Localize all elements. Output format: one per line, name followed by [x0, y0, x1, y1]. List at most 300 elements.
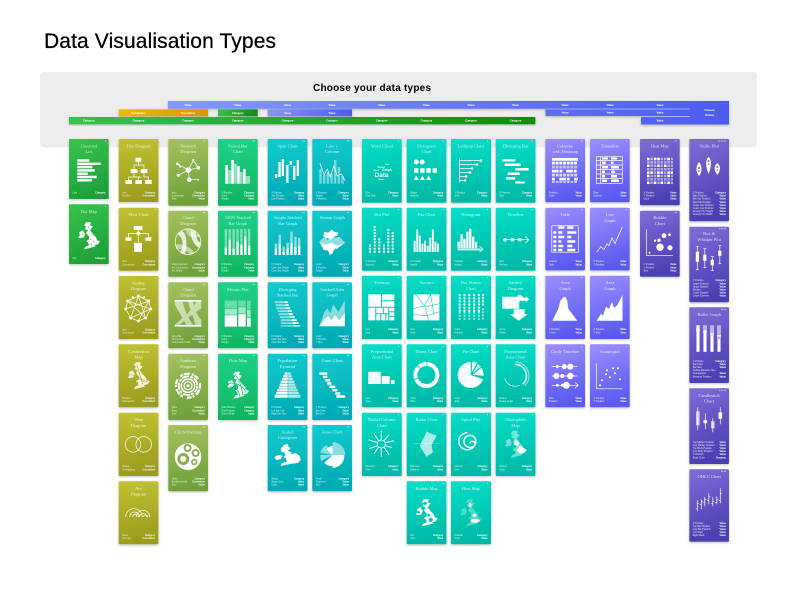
footer: Category [477, 534, 488, 537]
footer: X Position [693, 522, 704, 525]
footer: Bar End [316, 412, 325, 415]
footer: Shape [122, 465, 130, 468]
footer: Value [620, 263, 627, 266]
footer: Value [670, 263, 677, 266]
footer: Value [720, 534, 726, 537]
footer: Category [145, 192, 156, 194]
icon: word cloud [373, 163, 392, 181]
footer: Y Position [594, 400, 605, 403]
footer [549, 397, 582, 403]
footer [316, 406, 349, 415]
footer: Category [433, 397, 444, 400]
title: Stacked Area Graph: Graph [327, 292, 339, 297]
icon: OHLC ticks [696, 488, 722, 511]
icon: radial columns [368, 431, 394, 457]
footer [122, 397, 156, 403]
footer: Value [576, 195, 582, 198]
footer: Category [244, 335, 255, 338]
footer: Value [526, 468, 533, 471]
footer: Correlation [192, 409, 205, 412]
footer: Max Position [693, 195, 707, 198]
icon: candlesticks [696, 407, 722, 432]
title: Box & Whisker Plot: Whisker Plot [697, 237, 722, 242]
icon: timetable [596, 157, 622, 183]
card: Circle Packing [168, 425, 208, 491]
footer [222, 263, 255, 272]
card: Radial Column Chart [362, 413, 402, 476]
icon: lollipops [460, 158, 482, 182]
footer: Category [522, 260, 533, 263]
title: Line + Column: Line + [326, 144, 338, 148]
footer: Size [410, 537, 416, 540]
footer: Color [222, 338, 227, 341]
footer: Category [244, 409, 255, 412]
icon: 100% stacked bars [225, 229, 250, 255]
bar: value row 1 [168, 101, 729, 124]
title: Circle Packing: Circle Packing [175, 430, 202, 434]
footer: Center Angle [499, 400, 514, 403]
card: Venn Diagram [119, 413, 158, 476]
footer: Value [720, 201, 726, 204]
footer: Body Color [693, 456, 705, 459]
footer [366, 192, 399, 198]
footer: Category [338, 335, 349, 338]
footer [410, 192, 444, 198]
bar: value row 1: Value [378, 103, 386, 107]
icon: heat grid [647, 159, 673, 183]
bar: category long: Category [510, 119, 522, 123]
title: Mosaic Plot: Mosaic Plot [227, 287, 249, 292]
footer: X Position [271, 192, 283, 194]
card: 100% Stacked Bar Graph [218, 211, 258, 277]
card: Calendar with Heatmap [545, 139, 585, 202]
footer: X Position [316, 192, 327, 194]
title: Timeline: Timeline [508, 212, 524, 217]
icon: rose wedges [320, 442, 345, 468]
footer [693, 360, 726, 378]
footer: Position [549, 400, 558, 403]
footer: Correlation [142, 263, 156, 266]
card: Paired Bar Chart [218, 139, 258, 206]
footer: Value [481, 537, 488, 540]
icon: pyramid [275, 372, 300, 398]
icon: word cloud: Word [373, 170, 379, 172]
footer: Position [454, 260, 464, 263]
card: Voronoi [407, 276, 446, 339]
bar: category long [69, 117, 535, 124]
footer: Value [199, 412, 205, 415]
card: Timetable [590, 139, 630, 202]
icon: pictograms [414, 160, 437, 180]
footer: X Position [644, 263, 655, 266]
bar: correlation: Correlation [181, 111, 196, 115]
title: Area Graph: Area [605, 280, 614, 285]
title: Scaled Cartogram: Scaled [282, 430, 294, 434]
footer: X Position [594, 328, 605, 331]
footer: Value [481, 400, 488, 403]
icon: paired bars [225, 160, 250, 184]
title: Word Cloud: Word Cloud [371, 144, 394, 148]
footer: Value [720, 447, 726, 450]
footer: Value [343, 484, 349, 487]
icon: chord ring [175, 229, 201, 255]
title: Bubble Map: Bubble Map [415, 486, 438, 491]
bar: value row 1: Value [606, 103, 614, 107]
card: Diverging Bar [496, 139, 535, 203]
card: Span Chart [268, 139, 307, 206]
footer: Value [343, 341, 349, 344]
footer: Color Bar Size [271, 341, 287, 344]
footer: Column [594, 195, 602, 198]
footer: Lower Low Position [693, 207, 714, 210]
footer: Low Body Position [693, 450, 713, 453]
icon: alluvial bands [175, 300, 201, 327]
footer: Area [366, 400, 371, 403]
title: Simple Stacked Bar Graph: Simple Stacked [273, 215, 302, 220]
card: Bar Chart [407, 208, 446, 271]
title: Tree Diagram: Tree Diagram [126, 144, 152, 148]
icon: timeline arrow [503, 236, 529, 243]
footer: Value [437, 537, 444, 540]
title: Connection Map: Map [134, 354, 143, 359]
title: Rose Chart: Rose Chart [322, 430, 343, 434]
footer: X Position [222, 335, 233, 338]
title: Proportional Area Chart: Area Chart [372, 354, 393, 359]
footer: Item [122, 260, 127, 263]
icon: UK bubble map [416, 499, 438, 526]
icon: UK heat map [460, 499, 482, 526]
footer: Color [499, 468, 505, 471]
footer: Value [720, 444, 726, 447]
icon: line graph [596, 227, 622, 252]
footer: Column [549, 260, 558, 263]
card: Arc Diagram [119, 481, 158, 544]
footer: Category [715, 279, 726, 282]
card: Dot Matrix Chart [451, 276, 491, 339]
footer: Value [720, 375, 726, 378]
footer: Color [316, 335, 322, 338]
card: Histogram [451, 208, 491, 271]
footer: Value [437, 195, 444, 198]
footer [122, 260, 156, 266]
footer: Color [410, 397, 416, 400]
footer: Value [720, 207, 726, 210]
bar: value short: Value [284, 111, 292, 115]
footer: Arc Connection [172, 266, 189, 269]
icon: proportional squares [368, 372, 395, 384]
footer: Size [454, 400, 460, 403]
title: Flow Map: Flow Map [229, 358, 248, 363]
bar: category long: Category [465, 119, 477, 123]
footer: Category [338, 478, 349, 480]
title: Chord Diagram: Diagram [180, 221, 197, 226]
title: Heat Map: Heat Map [651, 144, 670, 148]
title: Histogram: Histogram [461, 212, 481, 217]
icon: stream shape [319, 230, 345, 255]
bar: value row 1: Value [656, 111, 664, 115]
footer: Value [720, 453, 726, 456]
footer: Bar Start [316, 409, 326, 412]
footer: Connection Width [172, 341, 191, 344]
bar: category long: Category [182, 119, 194, 123]
footer [316, 192, 349, 201]
bar: value row 1: Value [234, 103, 242, 107]
card: Unsorted List [69, 139, 109, 199]
icon: radar [414, 431, 439, 457]
title: Dot Map: Dot Map [81, 209, 98, 214]
footer: Value [343, 338, 349, 341]
icon: UK cartogram [275, 444, 301, 466]
title: Dot Plot: Dot Plot [374, 212, 390, 217]
footer: Height [222, 341, 229, 344]
footer [693, 522, 726, 537]
footer: X Position [693, 192, 704, 194]
footer: Shape Size [271, 481, 284, 484]
footer: Value [720, 531, 726, 534]
footer: X Position [316, 338, 327, 341]
footer [271, 192, 305, 201]
footer [271, 335, 305, 344]
footer: Y Position [644, 266, 655, 269]
footer: X Position [271, 406, 283, 409]
card: Stacked Area Graph [312, 282, 352, 348]
card: Lollipop Chart [451, 139, 491, 203]
icon: dot matrix [460, 295, 483, 320]
footer: Top Body Position [693, 447, 713, 450]
footer: Position [122, 397, 131, 400]
footer [172, 263, 205, 272]
footer [172, 192, 205, 201]
footer: Lower Extreme [693, 295, 710, 298]
icon: stacked bars [275, 232, 300, 255]
footer: Category [294, 192, 305, 194]
footer: Upper Extreme [693, 282, 710, 285]
card: Chord Diagram (alluvial) [168, 282, 208, 348]
footer: Value [576, 192, 582, 194]
footer: Category [388, 328, 399, 331]
title: Treemap: Treemap [374, 280, 391, 285]
card: Candlestick Chart [689, 388, 729, 464]
card: Heat Map (UK) [451, 481, 491, 544]
footer: Category [294, 406, 305, 409]
footer: Value [392, 468, 399, 471]
title: Network Diagram: Diagram [180, 149, 197, 154]
icon: violins [697, 157, 720, 176]
title: Unsorted List: Unsorted [81, 144, 97, 148]
title: Venn Diagram: Venn [134, 417, 143, 422]
card: Spiral Plot [451, 413, 491, 476]
footer: Value [526, 263, 533, 266]
card: Word Cloud [362, 139, 402, 203]
footer [549, 260, 582, 266]
footer: Color [454, 397, 460, 400]
title: Pictogram Chart: Chart [422, 149, 432, 154]
footer: Value [392, 263, 399, 266]
title: Line + Column: Column [325, 149, 340, 154]
title: Dot Matrix Chart: Chart [466, 286, 477, 291]
icon: tree [125, 158, 152, 184]
footer [454, 260, 488, 266]
title: Arc Diagram: Diagram [131, 491, 147, 496]
icon: sankey arrows [502, 295, 529, 321]
footer: Category [522, 465, 533, 468]
footer: Value [343, 269, 349, 272]
footer: Size [644, 269, 649, 272]
footer: Value [720, 441, 726, 444]
footer: Amount [410, 195, 419, 198]
title: Voronoi: Voronoi [419, 280, 435, 285]
footer [222, 406, 255, 415]
card: OHLC Chart [689, 469, 729, 542]
title: Scaled Cartogram: Cartogram [278, 435, 298, 440]
footer: Correlation [142, 468, 156, 471]
footer: Value [526, 400, 533, 403]
footer: Correlation [192, 338, 205, 341]
footer: Value [481, 263, 488, 266]
title: Proportional Area Chart: Area Chart [506, 354, 526, 359]
title: Chord Diagram: Chord [183, 287, 194, 292]
footer: Category [477, 192, 488, 194]
footer: Arrow Width [222, 412, 235, 415]
icon: jagged area [596, 295, 622, 321]
title: Proportional Area Chart: Proportional [371, 349, 393, 354]
footer: Position [122, 195, 131, 198]
footer: Color [644, 198, 649, 201]
footer: Radius [499, 397, 507, 400]
bar: value row 1: Value [656, 119, 664, 123]
footer: Low Position [271, 198, 285, 201]
footer: Value [576, 397, 582, 400]
footer [72, 192, 106, 194]
footer: Dynamic [716, 456, 726, 459]
footer [222, 192, 255, 201]
card: Chord Diagram [168, 211, 208, 277]
footer: Category [244, 266, 255, 269]
footer [172, 335, 205, 344]
footer: Value [720, 204, 726, 207]
footer: Shape [410, 192, 418, 194]
footer: Value [720, 295, 726, 298]
title: Sunburst Diagram: Sunburst [180, 358, 196, 363]
footer [454, 534, 488, 540]
footer: Value [199, 198, 205, 201]
title: Chord Diagram: Chord [183, 215, 194, 220]
footer: Size [549, 397, 554, 400]
footer: Value [248, 198, 255, 201]
footer: Value [437, 468, 444, 471]
footer [594, 192, 627, 198]
icon: area shape [552, 297, 577, 321]
footer: Min Top Position [693, 198, 711, 201]
footer: Value [670, 269, 677, 272]
footer: Value [298, 409, 305, 412]
card: Pie Chart [451, 344, 491, 407]
footer: Area [410, 331, 416, 334]
footer [454, 397, 488, 403]
footer: Category [244, 338, 255, 341]
bar: value row 1: Value [606, 111, 614, 115]
footer: Value [576, 331, 582, 334]
title: Sunburst Diagram: Diagram [180, 364, 197, 369]
title: Area Graph: Graph [604, 286, 616, 291]
footer: Value [392, 400, 399, 403]
footer: Category [145, 534, 156, 537]
title: Arc Diagram: Arc [135, 486, 142, 491]
footer: Item [172, 192, 176, 194]
footer: Node [122, 534, 129, 537]
footer: Start Position [222, 406, 236, 409]
footer: Value [620, 397, 627, 400]
footer: Value [343, 481, 349, 484]
footer: Category [244, 192, 255, 194]
footer: Med Top Position [693, 201, 712, 204]
footer: Color [222, 195, 227, 198]
footer: Category [194, 263, 205, 266]
footer [499, 465, 533, 471]
footer: Y Position [454, 192, 466, 194]
footer: Y Position [644, 195, 655, 198]
card: Pictogram Chart [407, 139, 446, 203]
card: Line + Column [312, 139, 352, 206]
title: OHLC Chart: OHLC Chart [697, 474, 722, 479]
title: Line Graph: Line [606, 212, 614, 217]
footer: Top Bar Position [693, 525, 711, 528]
footer: Category [433, 534, 444, 537]
footer: Value [720, 363, 726, 366]
icon: UK dot map [78, 222, 100, 249]
footer [172, 478, 205, 487]
bar: category long: Category [420, 119, 433, 123]
footer: Category [522, 192, 533, 194]
footer: Color Bar Height [271, 269, 289, 272]
footer [594, 260, 627, 266]
footer [410, 465, 444, 471]
footer: Category [477, 465, 488, 468]
footer: Category [194, 192, 205, 194]
footer: Measure Position [693, 375, 712, 378]
bar: category long: Category [133, 119, 145, 123]
footer [549, 192, 582, 198]
footer: Ring [172, 409, 177, 412]
footer: Arc Line [122, 537, 132, 540]
footer: Height [316, 195, 323, 198]
footer: Value [620, 331, 627, 334]
footer: Item [122, 328, 127, 332]
icon: mosaic blocks [225, 301, 251, 327]
footer: Item [366, 328, 370, 331]
card: Flow Chart [119, 208, 158, 271]
footer: Size [172, 484, 177, 487]
footer: Item [122, 192, 127, 194]
footer [499, 328, 533, 334]
card: Mosaic Plot [218, 282, 258, 348]
icon: bars [414, 229, 439, 252]
footer: Value [298, 195, 305, 198]
footer: Color [316, 263, 322, 266]
footer: Connection [172, 195, 185, 198]
footer: Value [576, 328, 582, 331]
footer: Value [670, 198, 677, 201]
footer: Category [522, 328, 533, 331]
footer: Value [620, 400, 627, 403]
footer: Value [248, 412, 255, 415]
footer: Correlation [192, 195, 205, 198]
footer: Value [343, 266, 349, 269]
card: Stream Graph [312, 211, 352, 277]
footer: Category [194, 406, 205, 409]
footer: Item [366, 397, 370, 400]
footer: Data [549, 263, 555, 266]
